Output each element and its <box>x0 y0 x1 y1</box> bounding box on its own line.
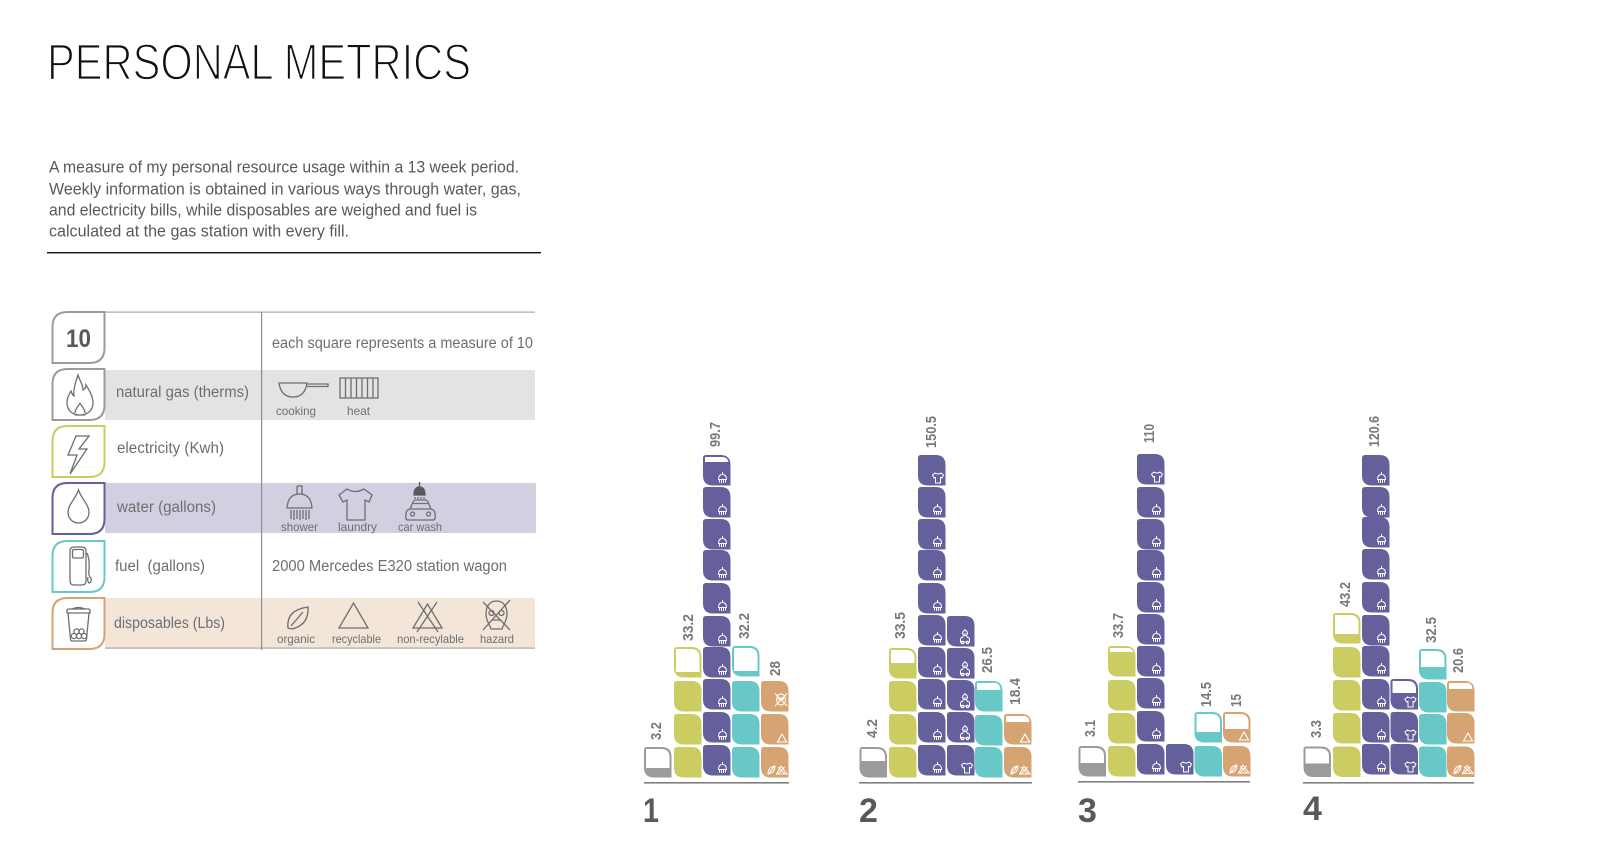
legend row: water: shower <box>281 520 318 534</box>
icon: trash cup <box>67 608 90 641</box>
fuel column 32.2: 32.2 <box>736 613 753 639</box>
legend row: fuel: 2000 Mercedes E320 station wagon <box>272 558 507 575</box>
icon: laundry shirt <box>339 489 372 520</box>
water column 110 part one <box>1137 424 1164 774</box>
legend row: disposables: recyclable <box>332 632 381 646</box>
natural gas column 3.2 <box>644 722 672 778</box>
fuel column 32.5: 32.5 <box>1423 617 1440 643</box>
legend row: electricity: electricity (Kwh) <box>117 440 224 457</box>
legend row: natural gas: cooking <box>276 404 316 418</box>
description text block: and electricity bills, while disposables are weighed and fuel is <box>49 202 477 220</box>
icon: fuel pump <box>70 547 91 585</box>
chart: week 4 <box>1303 416 1474 828</box>
natural gas column 3.3 <box>1304 720 1331 777</box>
water column 99.7: 99.7 <box>707 422 724 447</box>
fuel column 14.5: 14.5 <box>1198 682 1215 707</box>
fuel column 26.5: 26.5 <box>979 647 996 673</box>
description text block: calculated at the gas station with every fill. <box>49 222 349 240</box>
disposables column 28: 28 <box>767 661 784 676</box>
legend row: natural gas: natural gas (therms) <box>116 384 249 401</box>
electricity column 43.2: 43.2 <box>1337 582 1354 607</box>
legend row: water: car wash <box>398 520 442 534</box>
electricity column 33.7 <box>1108 613 1136 776</box>
icon: lightning bolt <box>68 436 89 474</box>
legend row: each square represents 10 <box>52 312 533 363</box>
legend row: disposables: disposables (Lbs) <box>114 615 225 632</box>
icon: flame <box>67 375 93 415</box>
water column 120.6 part one: 120.6 <box>1366 416 1383 447</box>
legend row: disposables <box>52 598 514 649</box>
week number 4: 4 <box>1303 790 1322 828</box>
legend row: disposables: organic <box>277 632 315 646</box>
fuel column 32.2 <box>732 613 760 778</box>
water column 110 part one: 110 <box>1141 424 1158 443</box>
week number 3: 3 <box>1078 792 1097 830</box>
legend row: water <box>52 482 442 534</box>
title: PERSONAL METRICS <box>47 34 471 90</box>
fuel column 32.5 <box>1419 617 1446 777</box>
week number 2: 2 <box>859 792 878 830</box>
electricity column 33.2: 33.2 <box>680 614 697 641</box>
electricity column 33.5: 33.5 <box>892 612 909 639</box>
disposables column 20.6: 20.6 <box>1450 648 1467 673</box>
icon: water drop <box>68 490 89 523</box>
chart: week 3 <box>1078 424 1250 830</box>
description text block: A measure of my personal resource usage within a 13 week period. <box>49 158 519 176</box>
disposables column 15 <box>1223 694 1250 776</box>
disposables column 20.6 <box>1447 648 1474 777</box>
legend row: disposables: hazard <box>480 632 514 646</box>
icon: organic leaf <box>288 607 308 629</box>
fuel column 26.5 <box>975 647 1002 778</box>
description text block <box>49 158 521 240</box>
electricity column 33.2 <box>674 614 702 778</box>
legend row: each square represents 10: 10 <box>66 325 91 353</box>
icon: cooking pan <box>279 383 328 397</box>
water column 99.7 <box>703 422 730 776</box>
icon: heat radiator <box>340 378 378 398</box>
legend row: water: laundry <box>338 520 377 534</box>
water column 120.6 part two <box>1390 679 1418 774</box>
natural gas column 3.1 <box>1078 720 1106 776</box>
legend row: each square represents 10: each square represents a measure of 10 <box>272 335 533 352</box>
natural gas column 3.1: 3.1 <box>1082 720 1099 737</box>
natural gas column 3.3: 3.3 <box>1308 720 1325 738</box>
legend row: fuel <box>52 541 507 592</box>
natural gas column 3.2: 3.2 <box>648 722 665 740</box>
icon: hazard skull <box>483 600 510 630</box>
icon: recyclable triangle <box>339 603 368 628</box>
description text block: Weekly information is obtained in various ways through water, gas, <box>49 180 521 198</box>
icon: shower <box>287 486 312 520</box>
legend row: natural gas: heat <box>347 404 371 418</box>
disposables column 28 <box>761 661 788 778</box>
chart: week 2 <box>859 416 1032 830</box>
disposables column 18.4: 18.4 <box>1007 677 1024 705</box>
water column 150.5 part two <box>947 616 974 776</box>
disposables column 15: 15 <box>1228 694 1245 707</box>
legend row: electricity <box>52 426 224 477</box>
legend row: disposables: non-recylable <box>397 632 464 646</box>
legend panel <box>52 312 536 650</box>
week number 1: 1 <box>643 792 659 830</box>
disposables column 18.4 <box>1004 677 1032 778</box>
electricity column 43.2 <box>1333 582 1360 777</box>
water column 110 part two <box>1166 744 1194 774</box>
electricity column 33.7: 33.7 <box>1110 613 1127 638</box>
icon: car wash <box>406 482 435 520</box>
water column 120.6 part one <box>1362 416 1390 774</box>
legend row: natural gas <box>52 369 378 420</box>
water column 150.5 part one <box>918 416 946 776</box>
fuel column 14.5 <box>1194 682 1222 776</box>
natural gas column 4.2 <box>860 719 887 778</box>
electricity column 33.5 <box>889 612 916 778</box>
chart: week 1 <box>643 422 789 830</box>
legend row: water: water (gallons) <box>116 499 216 516</box>
water column 150.5 part one: 150.5 <box>923 416 940 448</box>
legend row: fuel: fuel (gallons) <box>115 558 205 575</box>
icon: non-recyclable <box>413 602 442 632</box>
natural gas column 4.2: 4.2 <box>864 719 881 738</box>
